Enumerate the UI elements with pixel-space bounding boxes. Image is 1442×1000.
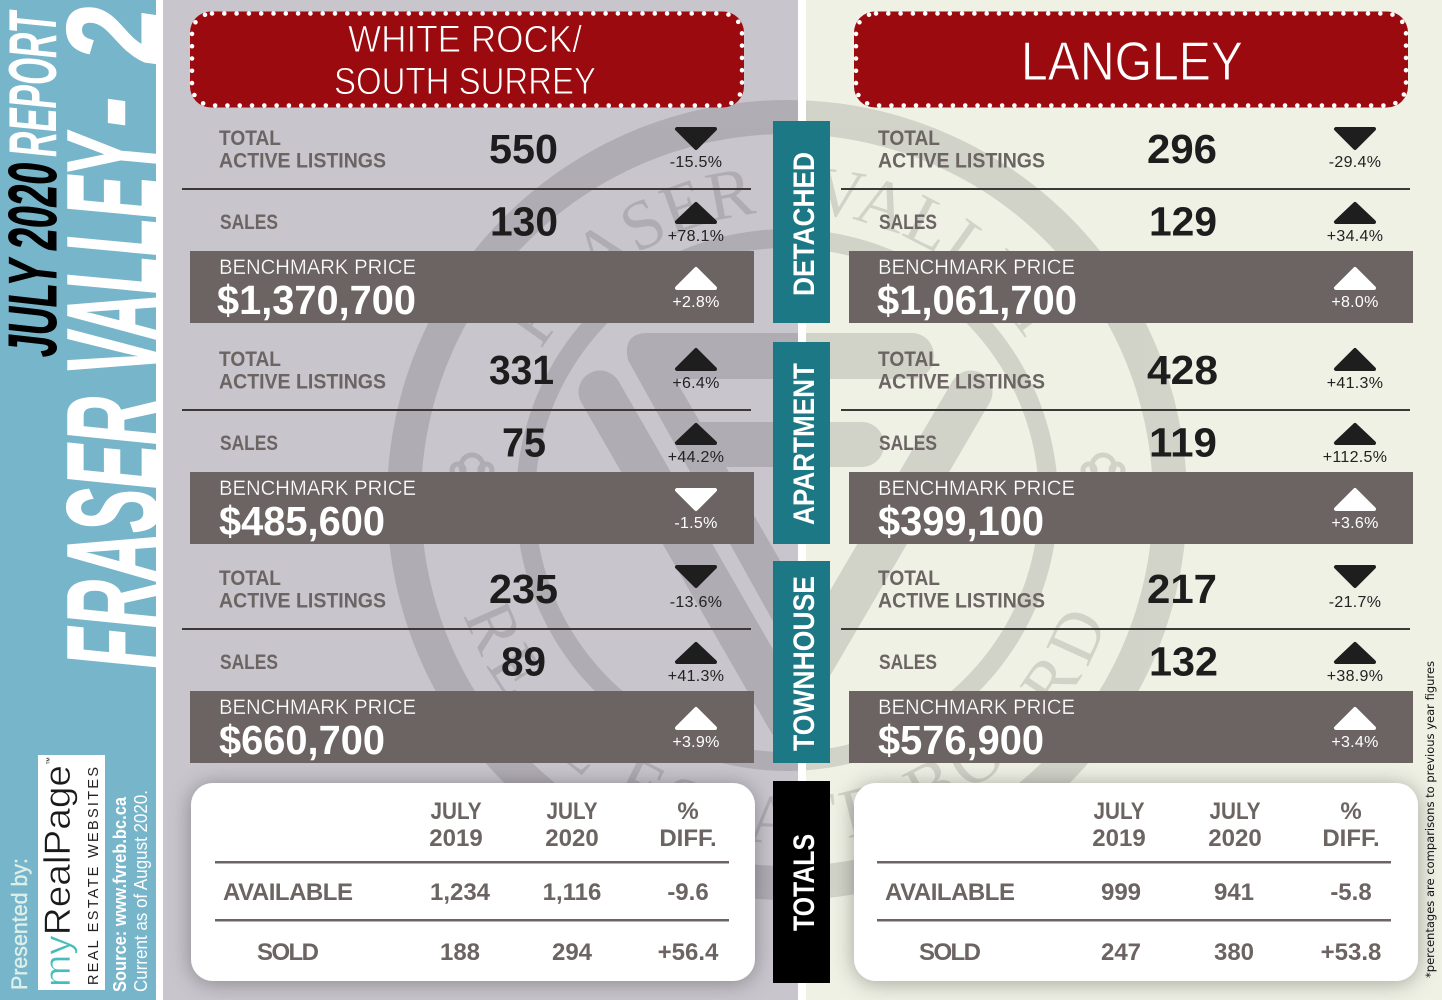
- panel: White Rock townhouse: ACTIVE LISTINGS: [219, 590, 386, 612]
- panel: Langley townhouse: TOTAL: [878, 567, 940, 590]
- panel: Langley apartment: +41.3%: [1327, 375, 1383, 392]
- panel: White Rock detached: BENCHMARK PRICE: [219, 256, 416, 279]
- table: White Rock totals: 1,234: [430, 879, 491, 906]
- panel: White Rock apartment: BENCHMARK PRICE: [219, 477, 416, 500]
- panel: Langley detached: +8.0%: [1331, 294, 1379, 311]
- panel: White Rock detached: +2.8%: [672, 294, 720, 311]
- table: White Rock totals: JULY: [430, 798, 482, 825]
- category tab: townhouse: [773, 561, 830, 763]
- panel: Langley detached: $1,061,700: [877, 277, 1077, 323]
- panel: White Rock townhouse: BENCHMARK PRICE: [219, 696, 416, 719]
- panel: White Rock townhouse: 89: [501, 638, 546, 684]
- panel: White Rock apartment: ACTIVE LISTINGS: [219, 370, 386, 394]
- banner: White Rock / South Surrey: [190, 12, 744, 108]
- table: Langley totals: 380: [1214, 939, 1254, 966]
- panel: White Rock apartment: $485,600: [219, 498, 385, 544]
- table: White Rock totals: 188: [440, 939, 480, 966]
- panel: Langley townhouse: [841, 566, 1413, 763]
- table: White Rock totals: SOLD: [257, 939, 319, 966]
- panel: left sidebar: [0, 0, 185, 1000]
- panel: White Rock townhouse: 235: [489, 566, 558, 612]
- watermark: Fraser Valley Real Estate Board seal: FRASER VALLEY: [517, 169, 1032, 348]
- category tab: detached: DETACHED: [788, 152, 821, 296]
- panel: White Rock apartment: -1.5%: [674, 515, 718, 532]
- panel: White Rock apartment: 331: [489, 347, 554, 393]
- panel: Langley apartment: 119: [1149, 420, 1217, 466]
- panel: Langley detached: TOTAL: [878, 127, 940, 150]
- panel: Langley detached: 296: [1147, 126, 1217, 172]
- panel: White Rock townhouse: SALES: [220, 651, 278, 674]
- table: White Rock totals: +56.4: [658, 939, 719, 966]
- panel: Langley detached: 129: [1149, 198, 1217, 244]
- panel: Langley apartment: TOTAL: [878, 348, 940, 371]
- category tab: townhouse: TOWNHOUSE: [788, 576, 821, 751]
- title: Fraser Valley - 2: FRASER: [41, 397, 185, 668]
- table: Langley totals: 999: [1101, 879, 1141, 906]
- panel: Langley detached: SALES: [879, 211, 937, 234]
- table: White Rock totals: 2019: [429, 825, 483, 852]
- panel: White Rock detached: 550: [489, 126, 558, 172]
- panel: White Rock detached: TOTAL: [219, 127, 281, 150]
- panel: White Rock detached: $1,370,700: [217, 277, 416, 323]
- panel: Langley apartment: 428: [1147, 347, 1218, 393]
- table: White Rock totals: AVAILABLE: [223, 879, 353, 906]
- panel: Langley detached: BENCHMARK PRICE: [878, 256, 1075, 279]
- table: White Rock totals: -9.6: [667, 879, 709, 906]
- panel: Langley detached: -29.4%: [1329, 154, 1381, 171]
- category tab: totals: [773, 781, 830, 983]
- panel: White Rock townhouse: +41.3%: [668, 668, 724, 685]
- category tab: detached: [773, 121, 830, 323]
- footnote: *percentages are comparisons to previous year figures: [1424, 661, 1437, 978]
- panel: White Rock apartment: 75: [502, 420, 546, 466]
- table: White Rock totals: 1,116: [543, 879, 601, 906]
- panel: Langley apartment: SALES: [879, 432, 937, 455]
- category tab: apartment: APARTMENT: [788, 363, 821, 525]
- panel: Langley apartment: +112.5%: [1323, 449, 1387, 466]
- panel: White Rock apartment: SALES: [220, 432, 278, 455]
- panel: White Rock detached: 130: [490, 198, 558, 244]
- table: White Rock totals: %: [677, 798, 699, 825]
- panel: Langley townhouse: 132: [1149, 638, 1218, 684]
- table: Langley totals: 941: [1214, 879, 1254, 906]
- panel: White Rock townhouse: +3.9%: [672, 734, 720, 751]
- text: source: Source: www.fvreb.bc.ca: [110, 796, 130, 992]
- logo: myRealPage: [37, 755, 105, 990]
- panel: White Rock detached: ACTIVE LISTINGS: [219, 150, 386, 172]
- table: White Rock totals: DIFF.: [659, 825, 717, 852]
- watermark: Fraser Valley Real Estate Board seal: REAL ESTATE BOARD: [464, 598, 1100, 842]
- banner: Langley: LANGLEY: [1021, 30, 1243, 92]
- logo: myRealPage: REAL ESTATE WEBSITES: [86, 767, 102, 985]
- panel: Langley detached: [841, 126, 1413, 323]
- table: Langley totals: 2019: [1092, 825, 1146, 852]
- table: Langley totals: 247: [1101, 939, 1141, 966]
- table: Langley totals: JULY: [1094, 798, 1144, 825]
- panel: White Rock apartment: +6.4%: [672, 375, 720, 392]
- panel: Langley apartment: +3.6%: [1331, 515, 1379, 532]
- panel: White Rock apartment: [182, 347, 754, 544]
- table: Langley totals: 2020: [1208, 825, 1262, 852]
- panel: White Rock townhouse: $660,700: [219, 717, 385, 763]
- banner: Langley: [854, 12, 1408, 108]
- table: Langley totals: SOLD: [919, 939, 981, 966]
- table: Langley totals: JULY: [1210, 798, 1260, 825]
- panel: Langley townhouse: $576,900: [878, 717, 1044, 763]
- panel: Langley townhouse: 217: [1147, 566, 1217, 612]
- panel: Langley townhouse: BENCHMARK PRICE: [878, 696, 1075, 719]
- panel: Langley apartment: BENCHMARK PRICE: [878, 477, 1075, 500]
- panel: Langley townhouse: SALES: [879, 651, 937, 674]
- table: Langley totals: +53.8: [1321, 939, 1381, 966]
- table: White Rock totals: 294: [552, 939, 593, 966]
- table: Langley totals: %: [1340, 798, 1362, 825]
- panel: Langley detached: ACTIVE LISTINGS: [878, 150, 1045, 172]
- panel: Langley detached: +34.4%: [1327, 228, 1383, 245]
- logo: myRealPage: ™: [45, 757, 54, 765]
- panel: Langley townhouse: +38.9%: [1327, 668, 1383, 685]
- panel: White Rock townhouse: TOTAL: [219, 567, 281, 590]
- panel: White Rock detached: SALES: [220, 211, 278, 234]
- table: White Rock totals: JULY: [546, 798, 598, 825]
- panel: White Rock townhouse: [182, 566, 754, 763]
- panel: Langley townhouse: ACTIVE LISTINGS: [878, 590, 1045, 612]
- panel: Langley apartment: ACTIVE LISTINGS: [878, 370, 1045, 394]
- banner: White Rock / South Surrey: SOUTH SURREY: [334, 61, 596, 103]
- panel: Langley apartment: $399,100: [878, 498, 1044, 544]
- watermark: Fraser Valley Real Estate Board seal: [388, 100, 1186, 900]
- panel: White Rock detached: -15.5%: [670, 154, 722, 171]
- banner: White Rock / South Surrey: WHITE ROCK/: [348, 19, 582, 61]
- category tab: apartment: [773, 342, 830, 544]
- panel: White Rock townhouse: -13.6%: [670, 594, 722, 611]
- table: White Rock totals: 2020: [545, 825, 599, 852]
- panel: White Rock detached: +78.1%: [668, 228, 724, 245]
- panel: Langley townhouse: -21.7%: [1329, 594, 1381, 611]
- table: White Rock totals: [191, 783, 755, 981]
- table: Langley totals: AVAILABLE: [885, 879, 1015, 906]
- center white strip: [798, 0, 806, 1000]
- panel: Langley townhouse: +3.4%: [1331, 734, 1379, 751]
- table: Langley totals: -5.8: [1330, 879, 1372, 906]
- table: Langley totals: [854, 783, 1418, 981]
- panel: White Rock apartment: TOTAL: [219, 348, 281, 371]
- panel: Langley apartment: [841, 347, 1413, 544]
- logo: myRealPage: myRealPage: [37, 765, 78, 987]
- text: presented by: Presented by:: [7, 858, 32, 990]
- title: Fraser Valley - 2: -: [34, 97, 178, 127]
- panel: White Rock detached: [182, 126, 754, 323]
- category tab: totals: TOTALS: [788, 834, 821, 931]
- text: current date: Current as of August 2020.: [131, 790, 151, 992]
- table: Langley totals: DIFF.: [1322, 825, 1380, 852]
- panel: White Rock apartment: +44.2%: [668, 449, 724, 466]
